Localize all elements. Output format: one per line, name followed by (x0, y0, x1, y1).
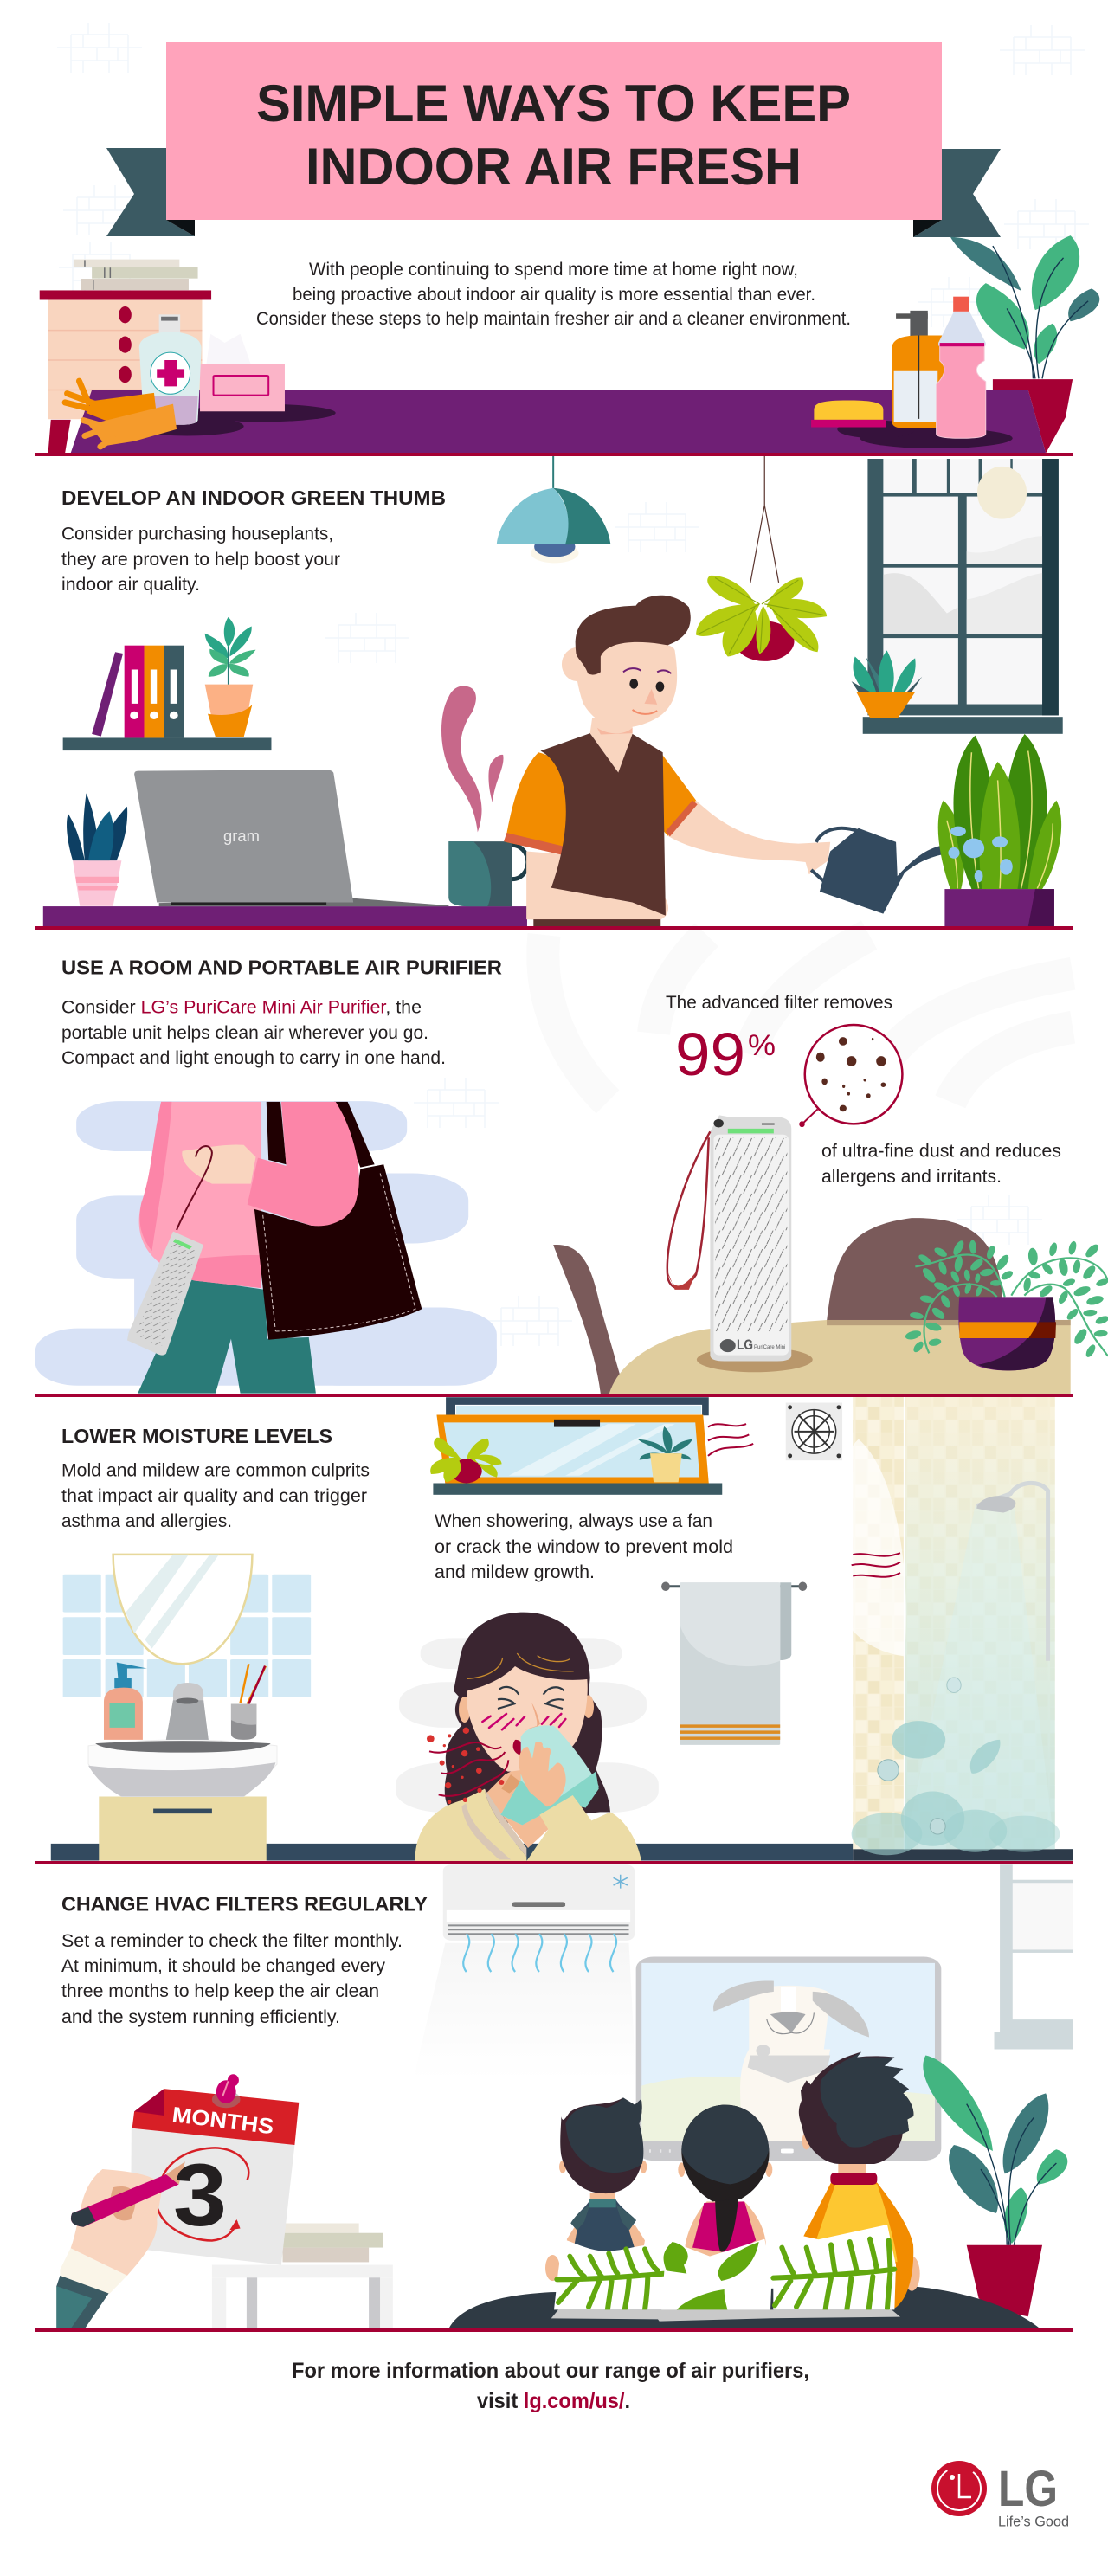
hanging towel (661, 1581, 807, 1745)
body text: and the system running efficiently. (61, 2007, 340, 2027)
panel: lower moisture levels (51, 1397, 1073, 1861)
purifier logo text: LG (737, 1336, 753, 1353)
ribbon: right tail (913, 149, 1001, 237)
window palm plant (451, 1459, 482, 1483)
rubber gloves (65, 381, 177, 447)
exhaust fan (786, 1403, 842, 1460)
hand (519, 1742, 566, 1806)
sleeve (248, 1102, 359, 1226)
small potted plant on shelf (205, 617, 256, 737)
calendar (131, 2074, 299, 2265)
towel fold (500, 1772, 599, 1825)
books under calendar (283, 2224, 383, 2262)
child left (545, 2097, 647, 2281)
title: INDOOR AIR FRESH (306, 138, 802, 196)
child right (799, 2052, 920, 2309)
sanitizer bottle (139, 314, 202, 425)
robe collar (461, 1789, 526, 1859)
basin (88, 1740, 277, 1797)
table (609, 1320, 1071, 1394)
toothbrush cup (231, 1664, 266, 1740)
shelf with binders (63, 646, 271, 750)
shower advice text: and mildew growth. (435, 1562, 595, 1582)
section dividers (35, 453, 1073, 2332)
pendant lamp (497, 454, 610, 563)
nose (525, 1703, 540, 1729)
purple pot (958, 1297, 1056, 1370)
banner panel (166, 42, 942, 220)
woman sneezing (416, 1613, 641, 1861)
body text: indoor air quality. (61, 575, 200, 595)
desk plant (67, 793, 127, 906)
body text: three months to help keep the air clean (61, 1981, 379, 2001)
pillows (551, 2225, 900, 2322)
callout: filter statistic: % (748, 1029, 776, 1062)
pillow right (773, 2225, 896, 2309)
robe left (416, 1789, 526, 1861)
soap bottle (104, 1662, 147, 1740)
illustration: living room (56, 1864, 1073, 2328)
body text: portable unit helps clean air wherever you go. (61, 1023, 428, 1043)
calendar label: months: MONTHS (171, 2103, 275, 2139)
body text: Consider LG’s PuriCare Mini Air Purifier , the (61, 998, 421, 1018)
dog (713, 1980, 869, 2141)
watering can (811, 828, 944, 914)
ribbon folds (166, 220, 942, 237)
sofa (448, 2286, 1040, 2328)
body text: Compact and light enough to carry in one hand. (61, 1048, 446, 1068)
callout: filter statistic: of ultra-fine dust and reduces (821, 1142, 1061, 1162)
callout: filter statistic: 99 (675, 1021, 745, 1088)
orange pump bottle (892, 311, 948, 428)
logo mark (929, 2458, 989, 2519)
ears (459, 1697, 470, 1723)
callout: filter statistic: The advanced filter removes (666, 993, 892, 1013)
right ear (583, 1695, 594, 1718)
laptop (134, 770, 448, 906)
background brick patterns (57, 23, 1089, 1346)
crimson pot plant (923, 2056, 1067, 2316)
mini purifier (127, 1232, 203, 1356)
calendar number: 3: 3 (173, 2146, 227, 2244)
illustration: bathroom (51, 1397, 1073, 1861)
illustration: woman and table scene (35, 935, 1073, 1394)
shower advice text: When showering, always use a fan (435, 1511, 712, 1531)
logo wordmark: LG (998, 2461, 1058, 2517)
tote bag (254, 1164, 422, 1340)
pillow bases (551, 2309, 900, 2322)
side window (995, 1864, 1073, 2049)
heading: CHANGE HVAC FILTERS REGULARLY (61, 1892, 428, 1915)
cool air beam (414, 1943, 636, 2080)
arrows around 3 (157, 2148, 248, 2240)
head (562, 647, 593, 681)
body text: Consider purchasing houseplants, (61, 525, 333, 544)
background swooshes (543, 935, 1073, 1102)
neck (590, 718, 633, 772)
window potted plant (638, 1426, 692, 1459)
sleeves (506, 752, 569, 854)
hanging plant (696, 454, 827, 661)
child middle (678, 2105, 772, 2257)
chest (485, 1768, 565, 1848)
logo tagline: Life’s Good (998, 2514, 1069, 2530)
body text: asthma and allergies. (61, 1511, 232, 1531)
blue cloud backdrop (35, 1101, 497, 1386)
window sill plant (852, 650, 922, 718)
hand (182, 1144, 256, 1184)
desk (43, 906, 527, 926)
snake plant (938, 734, 1061, 927)
man (504, 596, 830, 927)
bathroom window (430, 1397, 722, 1495)
tissue box (200, 334, 285, 411)
water drops (948, 827, 1013, 882)
purifier (667, 1115, 791, 1361)
body text: Set a reminder to check the filter monthly. (61, 1931, 403, 1951)
mirror (113, 1555, 252, 1664)
sink cabinet (99, 1797, 267, 1861)
face (467, 1666, 588, 1772)
body text: Mold and mildew are common culprits (61, 1460, 370, 1480)
footer call to action: For more information about our range of air purifiers, (292, 2359, 809, 2383)
table shadows (131, 404, 1013, 448)
shower stall (830, 1397, 1060, 1855)
towel (500, 1725, 599, 1825)
neck shadow (501, 1774, 522, 1794)
callout: filter statistic (666, 993, 1061, 1187)
heading: LOWER MOISTURE LEVELS (61, 1425, 332, 1447)
vines and purple pot (905, 1239, 1108, 1370)
children on the sofa (545, 2052, 920, 2322)
wall tiles (63, 1575, 311, 1697)
leaves middle (664, 2242, 759, 2320)
title: SIMPLE WAYS TO KEEP (256, 74, 851, 132)
pillow middle (660, 2239, 772, 2320)
steam waves (852, 1553, 900, 1577)
pink spray bottle (937, 297, 986, 438)
robe right (526, 1795, 641, 1861)
mouth (513, 1740, 525, 1756)
footer call to action: visit lg.com/us/. (477, 2389, 630, 2413)
left chair (553, 1245, 625, 1394)
panel: develop an indoor green thumb (43, 454, 1063, 927)
pillow left (554, 2239, 665, 2309)
purifier logo text (737, 1336, 785, 1353)
fern left (557, 2249, 665, 2311)
illustration: man watering plants (43, 454, 1063, 927)
right chair (827, 1218, 1003, 1321)
hanging purifier strap (177, 1146, 212, 1230)
woman (127, 1102, 422, 1394)
fern right (773, 2239, 894, 2311)
purple table top (71, 390, 1046, 453)
mug with steam (441, 686, 528, 906)
hair (445, 1613, 610, 1824)
sneeze particles (427, 1728, 508, 1804)
intro text: being proactive about indoor air quality is more essential than ever. (293, 285, 815, 305)
grey blob backdrop (396, 1638, 659, 1813)
television (636, 1957, 941, 2161)
pin (212, 2091, 241, 2108)
intro text: With people continuing to spend more time at home right now, (309, 260, 798, 280)
lg logo (929, 2458, 1069, 2530)
side table (212, 2265, 393, 2328)
air conditioner (443, 1864, 635, 1972)
body text: they are proven to help boost your (61, 550, 340, 570)
ribbon: left tail (106, 148, 195, 236)
drawer cabinet (40, 290, 211, 453)
shower head (976, 1483, 1048, 1661)
heat waves (708, 1424, 753, 1456)
intro text: Consider these steps to help maintain fresher air and a cleaner environment. (256, 309, 851, 329)
heading: DEVELOP AN INDOOR GREEN THUMB (61, 486, 446, 509)
face details (629, 679, 638, 689)
soap bar (811, 401, 886, 428)
vines (905, 1239, 1108, 1359)
floor (51, 1844, 1073, 1861)
magnified dust circle (799, 1025, 902, 1127)
hair strands (467, 1653, 574, 1678)
hair (576, 596, 691, 675)
purifier logo text: PuriCare Mini (754, 1345, 785, 1350)
faucet (166, 1683, 209, 1740)
plant with crimson pot (950, 235, 1099, 453)
eyes (498, 1687, 564, 1709)
hand with pencil (56, 2161, 185, 2328)
title banner (106, 42, 1001, 237)
stack of books (74, 260, 198, 290)
window (863, 459, 1063, 734)
arm and hand (526, 852, 668, 924)
body text: that impact air quality and can trigger (61, 1486, 367, 1506)
callout: filter statistic: allergens and irritants. (821, 1167, 1002, 1187)
gram logo text: gram (223, 828, 260, 845)
shower advice text: or crack the window to prevent mold (435, 1537, 733, 1557)
scene: cleaning supplies on a purple table (40, 235, 1099, 453)
vest (540, 733, 666, 916)
panel: change hvac filters regularly (56, 1864, 1073, 2328)
body text: At minimum, it should be changed every (61, 1956, 385, 1976)
blush (482, 1714, 565, 1729)
panel: use a room and portable air purifier (35, 935, 1108, 1394)
heading: USE A ROOM AND PORTABLE AIR PURIFIER (61, 956, 502, 978)
